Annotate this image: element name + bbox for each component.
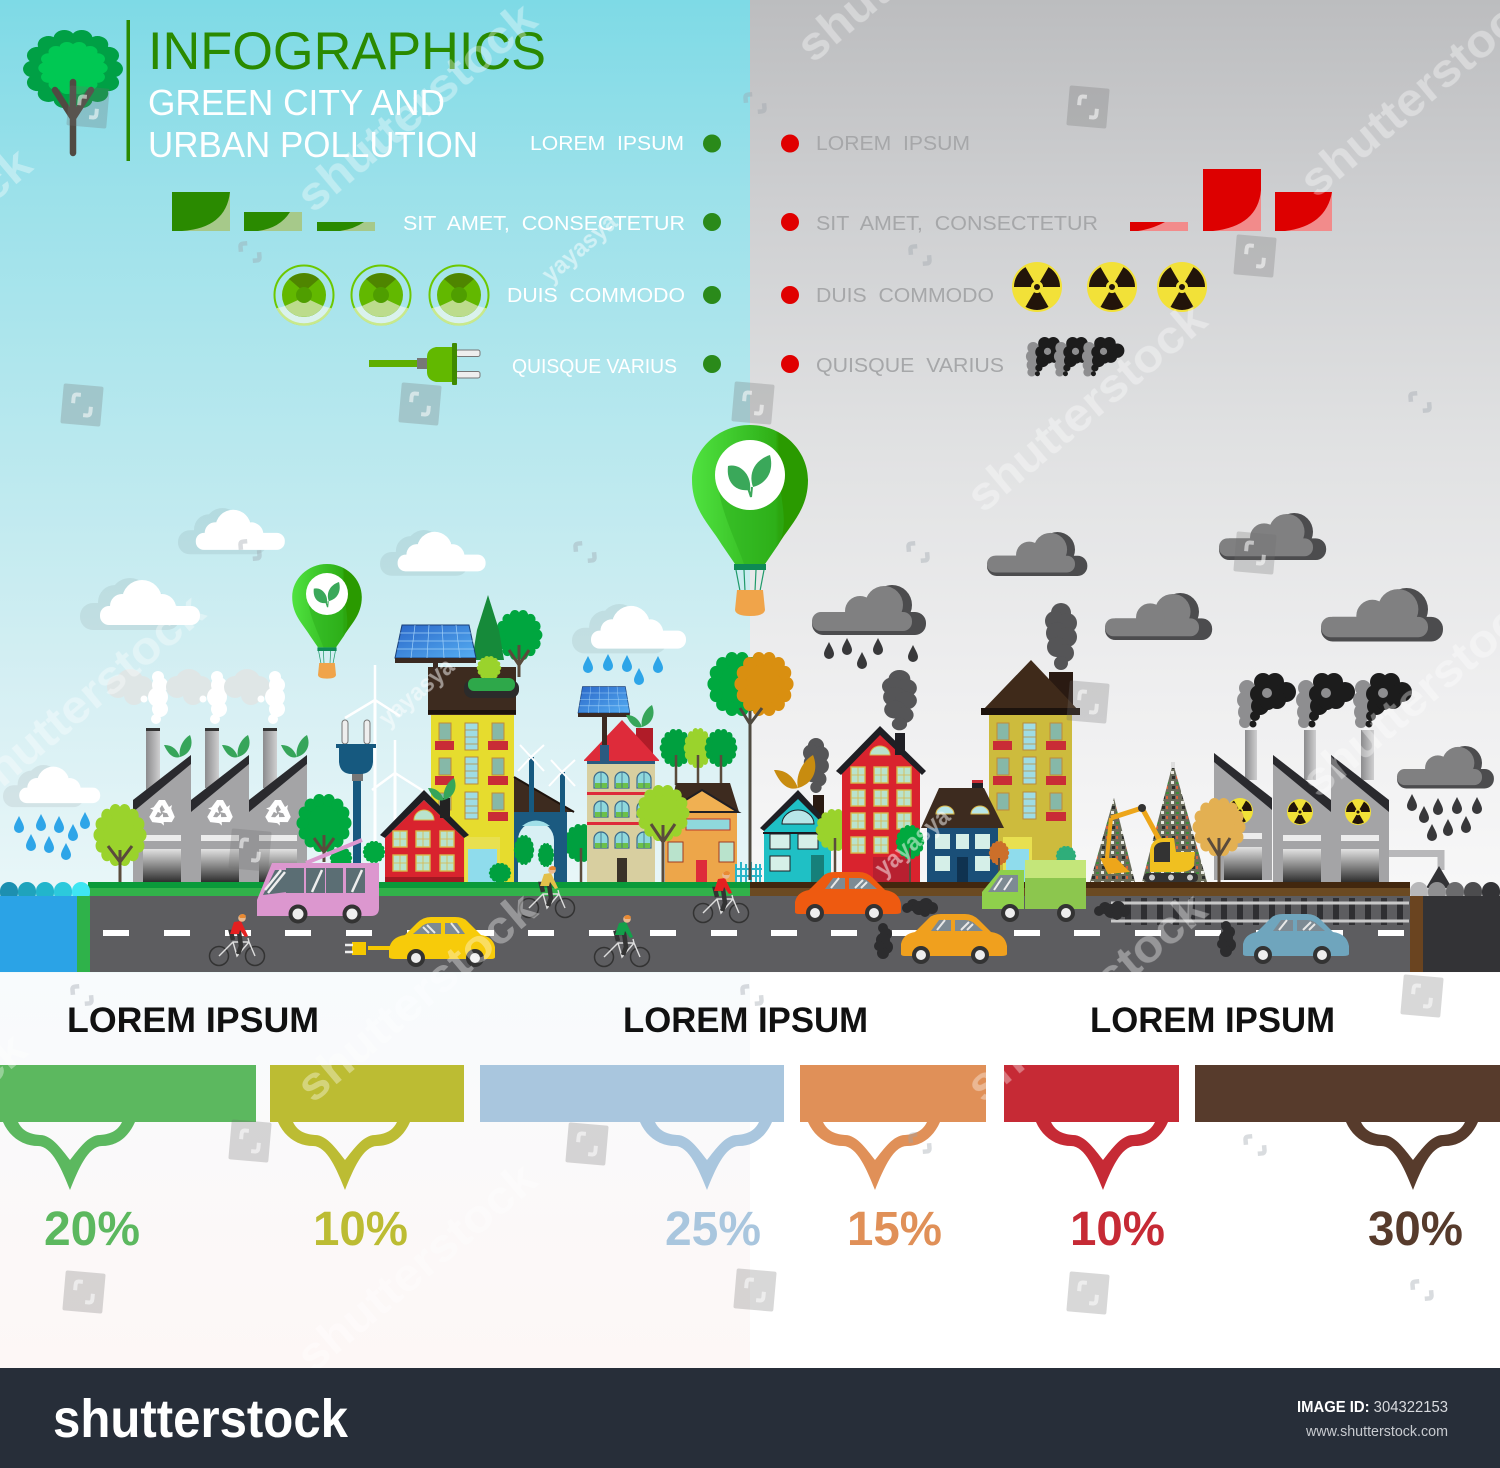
section heading 1: LOREM IPSUM	[67, 1001, 319, 1040]
icon: green plug	[369, 343, 480, 385]
right legend labels: LOREM IPSUM	[816, 133, 970, 155]
grey clouds	[812, 513, 1494, 788]
contributor watermark: yayasya	[870, 802, 957, 883]
stat: orange 15%	[800, 1065, 986, 1256]
small wind turbines	[518, 745, 575, 812]
right brown strip	[750, 882, 1410, 896]
icons: eco energy circles	[274, 266, 488, 325]
stat: brown 30%	[1195, 1065, 1500, 1256]
background: smog half	[750, 0, 1500, 973]
green truck	[982, 860, 1086, 922]
excavator	[1100, 804, 1198, 882]
railway track	[1111, 903, 1409, 921]
contributor watermark: yayasya	[374, 652, 461, 733]
amber car	[901, 914, 1007, 964]
title: INFOGRAPHICS	[148, 22, 546, 81]
small orange and green trees	[989, 841, 1076, 882]
orange car	[795, 872, 901, 922]
trash piles	[1090, 762, 1207, 882]
clean water	[0, 882, 90, 972]
hot air balloon large	[692, 425, 808, 616]
cyclist: red	[210, 914, 264, 966]
contributor watermark	[374, 208, 957, 883]
polluted water	[1410, 882, 1500, 972]
watermark text: shutterstock	[956, 291, 1217, 522]
background: lower left panel	[0, 973, 750, 1368]
exhaust smoke	[874, 898, 1236, 959]
left legend labels: LOREM IPSUM	[530, 133, 684, 155]
smoke from houses	[803, 603, 1077, 793]
red house	[380, 778, 469, 882]
right legend labels: DUIS COMMODO	[816, 285, 994, 307]
electric plug tower	[336, 720, 376, 882]
left green strip	[88, 882, 750, 896]
stat: green 20%	[0, 1065, 256, 1256]
title divider line	[126, 20, 130, 161]
red apartment building	[836, 726, 926, 882]
blue car	[1243, 914, 1349, 964]
right legend labels: SIT AMET, CONSECTETUR	[816, 213, 1098, 235]
blue arch house	[514, 777, 574, 882]
stat: brown 30%: 30%	[1368, 1203, 1463, 1256]
lime tree by teal house	[816, 809, 854, 882]
solar tower building	[395, 595, 542, 882]
watermark text: shutterstock	[286, 881, 547, 1112]
left legend labels	[403, 133, 685, 378]
icon: tree logo	[23, 30, 123, 153]
stat: red 10%: 10%	[1070, 1203, 1165, 1256]
stat: green 20%: 20%	[44, 1203, 140, 1256]
dirty rain center	[824, 638, 918, 669]
left legend labels: QUISQUE VARIUS	[512, 356, 677, 378]
dirty rain right	[1407, 794, 1482, 841]
trio of rooftop trees	[660, 728, 737, 785]
stat: orange 15%: 15%	[847, 1203, 942, 1256]
watermark text: shutterstock	[286, 1151, 547, 1382]
bush	[489, 863, 511, 883]
left legend dots	[703, 134, 721, 373]
yellow tower	[981, 660, 1080, 882]
subtitle	[148, 82, 478, 165]
half green half orange central tree	[707, 652, 794, 880]
green mini bar chart	[172, 192, 375, 231]
road lane markings	[103, 930, 1404, 936]
lime tree by orange house	[636, 785, 690, 882]
trolley bus	[257, 840, 379, 924]
footer logo: shutterstock	[53, 1389, 349, 1449]
clean rain left	[14, 812, 90, 860]
cyclist: green	[594, 915, 650, 966]
right legend dots	[781, 134, 799, 373]
right legend labels	[816, 133, 1098, 377]
footer website: www.shutterstock.com	[1305, 1424, 1448, 1440]
orange house	[665, 783, 739, 882]
subtitle: GREEN CITY AND	[148, 82, 445, 123]
green tree by red building	[896, 825, 924, 882]
stat: blue 25%	[480, 1065, 784, 1256]
background: lower right panel	[750, 973, 1500, 1368]
footer image id: IMAGE ID: 304322153	[1297, 1399, 1448, 1416]
cream house with solar panel	[578, 687, 659, 882]
background: clean sky half	[0, 0, 750, 973]
stat: blue 25%: 25%	[665, 1203, 761, 1256]
stat: olive 10%	[270, 1065, 464, 1256]
cyclist: red right	[694, 871, 748, 922]
section heading 2: LOREM IPSUM	[623, 1001, 868, 1040]
small green trees	[330, 824, 598, 882]
clean rain center	[583, 654, 663, 685]
tree: lime left	[93, 804, 147, 882]
contributor watermark: yayasya	[537, 208, 624, 289]
icons: radiation	[1012, 262, 1207, 312]
waste pipe	[1389, 854, 1441, 870]
green factory	[107, 669, 309, 882]
road	[90, 896, 1410, 972]
teal house	[760, 755, 831, 882]
subtitle: URBAN POLLUTION	[148, 124, 478, 165]
watermark text: shutterstock	[956, 881, 1217, 1112]
stat: olive 10%: 10%	[313, 1203, 408, 1256]
pollution outflow	[1426, 866, 1452, 888]
red mini bar chart	[1130, 169, 1332, 231]
cyclist: yellow	[520, 866, 574, 918]
white clouds	[3, 508, 686, 807]
tree: green by factory	[296, 794, 352, 862]
tree: autumn	[1192, 798, 1246, 882]
navy house	[921, 780, 1004, 882]
fence	[736, 862, 762, 882]
watermark marks	[60, 85, 1444, 1315]
footer bar	[0, 1368, 1500, 1468]
electric yellow car with plug	[345, 917, 495, 967]
section heading 3: LOREM IPSUM	[1090, 1001, 1335, 1040]
right legend labels: QUISQUE VARIUS	[816, 355, 1004, 377]
stat: red 10%	[1004, 1065, 1179, 1256]
icons: smoke	[1026, 337, 1124, 377]
polluting factory	[1214, 673, 1412, 882]
left legend labels: SIT AMET, CONSECTETUR	[403, 213, 685, 235]
left legend labels: DUIS COMMODO	[507, 285, 685, 307]
hot air balloon small	[292, 564, 362, 679]
wind turbines behind city	[345, 665, 425, 850]
watermark text: shutterstock	[286, 0, 547, 222]
